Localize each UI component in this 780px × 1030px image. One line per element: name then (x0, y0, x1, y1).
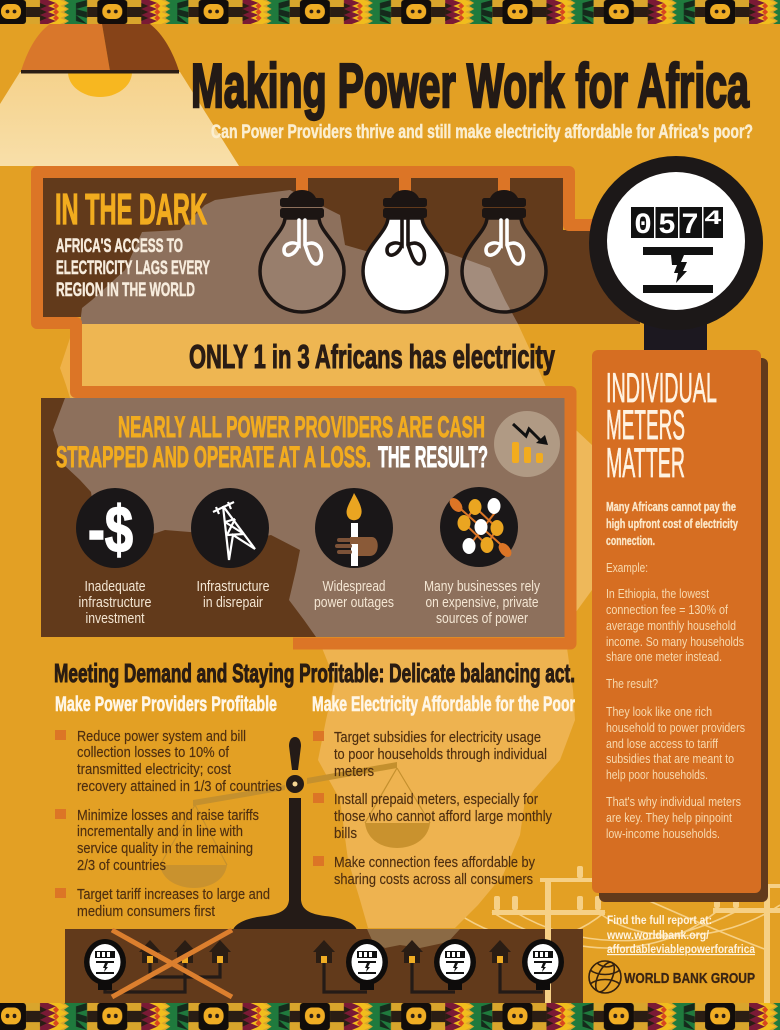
label: businesses rely on private power: Many businesses rely (424, 579, 541, 595)
icon: left light bulb (260, 166, 344, 312)
text block: access to electricity (56, 236, 210, 301)
text block: example: They look like one rich (606, 705, 712, 719)
list: electricity affordable: Install prepaid meters, especially for (334, 792, 538, 808)
illustration: balance scale (160, 737, 430, 930)
text block: access to electricity: REGION IN THE WORLD (56, 280, 195, 301)
panel: cash strapped background (41, 398, 565, 637)
top pattern band (0, 0, 780, 24)
heading: individual meters matter: MATTER (606, 439, 685, 486)
panel: in the dark brown background (43, 178, 640, 324)
icon: hanging lamp (21, 24, 179, 97)
text block: example: average monthly household (606, 619, 736, 633)
label: inadequate investment: Inadequate (84, 579, 146, 595)
list: providers profitable: Target tariff increases to large and (77, 887, 270, 903)
meters and houses: individual meters (313, 939, 564, 990)
icon: minus dollar: -$ (88, 492, 133, 566)
meters and houses: shared meter (84, 939, 231, 990)
list: electricity affordable: Target subsidies for electricity usage (334, 730, 541, 746)
label: infrastructure in disrepair: Infrastructure (196, 579, 270, 595)
list: providers profitable: incrementally and in line with (77, 824, 243, 840)
lamp light beam (0, 72, 239, 166)
orange frame connecting the panels (37, 172, 602, 644)
cross-out mark (112, 930, 232, 997)
heading: cash strapped (56, 411, 488, 474)
list: providers profitable: service quality in the remaining (77, 841, 253, 857)
callout: only 1 in 3: ONLY 1 in 3 Africans has electricity (189, 338, 555, 375)
text block: example: income. So many households (606, 635, 744, 649)
power lines illustration (440, 866, 780, 1003)
icon: electricity meter: 7 (681, 209, 699, 243)
subheading: make electricity affordable: Make Electricity Affordable for the Poor (312, 693, 575, 716)
panel: households and meters (65, 929, 583, 1003)
list: providers profitable: transmitted electricity; cost (77, 762, 231, 778)
icon: transmission tower (191, 488, 269, 568)
list: providers profitable: Minimize losses and raise tariffs (77, 808, 259, 824)
text block: access to electricity: AFRICA'S ACCESS TO (56, 236, 183, 257)
text block: upfront cost: Many Africans cannot pay the (606, 500, 736, 514)
logo: world bank group (589, 960, 755, 994)
report link: affordableviablepowerforafrica (607, 944, 756, 956)
label: widespread outages: Widespread (322, 579, 386, 595)
Africa map: northern part on panel (80, 190, 518, 324)
list: providers profitable (55, 729, 282, 920)
text block: example: Example: (606, 561, 648, 575)
report link: Find the full report at: (607, 915, 712, 927)
text block: example: subsidies that are meant to (606, 752, 734, 766)
list: electricity affordable: sharing costs across all consumers (334, 872, 533, 888)
text block: example: share one meter instead. (606, 650, 722, 664)
label: businesses rely on private power: on expensive, private (426, 595, 538, 611)
list: providers profitable: Reduce power system and bill (77, 729, 246, 745)
report link (606, 915, 756, 956)
list: providers profitable: collection losses to 10% of (77, 745, 230, 761)
heading: cash strapped: STRAPPED AND OPERATE AT A LOSS. (56, 441, 371, 474)
text block: example: and lose access to tariff (606, 737, 718, 751)
heading: individual meters matter: METERS (606, 401, 685, 448)
text block: example (606, 561, 745, 841)
text block: example: help poor households. (606, 768, 708, 782)
icon: electricity meter: 0 (634, 209, 652, 243)
heading: in the dark: IN THE DARK (55, 185, 207, 234)
label: inadequate investment (78, 579, 152, 627)
Africa map: panel two overlay (53, 398, 565, 637)
panel: individual meters (592, 350, 761, 893)
text block: example: low-income households. (606, 827, 720, 841)
heading: individual meters matter (606, 364, 717, 486)
text block: example: That's why individual meters (606, 795, 741, 809)
Africa map west coast sliver (60, 335, 76, 398)
text block: upfront cost (606, 500, 738, 548)
report link: www.worldbank.org/ (606, 930, 710, 942)
Africa map silhouette, light southern part (318, 648, 575, 928)
text block: example: The result? (606, 677, 658, 691)
label: infrastructure in disrepair (196, 579, 270, 611)
icon: electricity meter: 5 (658, 209, 676, 243)
list: electricity affordable (313, 730, 553, 888)
wiring (105, 960, 543, 992)
icon: private power network (440, 487, 518, 567)
bottom pattern band (0, 1003, 780, 1030)
text block: example: household to power providers (606, 721, 745, 735)
label: widespread outages (314, 579, 394, 611)
icon: electricity meter: 4 (704, 208, 722, 231)
list: electricity affordable: meters (334, 764, 374, 780)
list: electricity affordable: those who cannot afford large monthly (334, 809, 553, 825)
icon: right light bulb (462, 166, 546, 312)
subheading: make providers profitable: Make Power Providers Profitable (55, 693, 277, 716)
list: providers profitable: medium consumers first (77, 904, 215, 920)
highlight band: only 1 in 3 (81, 324, 546, 387)
icon: middle lit bulb (363, 166, 447, 312)
list: providers profitable: recovery attained in 1/3 of countries (77, 779, 282, 795)
label: infrastructure in disrepair: in disrepair (203, 595, 263, 611)
Africa map east horn sliver (576, 430, 592, 612)
label: businesses rely on private power: sources of power (436, 611, 528, 627)
list: electricity affordable: to poor households through individual (334, 747, 547, 763)
text block: upfront cost: connection. (606, 534, 655, 548)
list: electricity affordable: Make connection fees affordable by (334, 855, 536, 871)
heading: cash strapped: NEARLY ALL POWER PROVIDERS ARE CASH (118, 411, 485, 444)
heading: cash strapped: THE RESULT? (378, 441, 488, 474)
list: providers profitable: 2/3 of countries (77, 858, 166, 874)
panel: individual meters shadow (599, 358, 768, 902)
icon: candle in hand (315, 488, 393, 568)
text block: example: are key. They help pinpoint (606, 811, 732, 825)
list: electricity affordable: bills (334, 826, 357, 842)
label: inadequate investment: investment (86, 611, 144, 627)
text block: example: In Ethiopia, the lowest (606, 587, 709, 601)
label: businesses rely on private power (424, 579, 541, 627)
icon: minus dollar (76, 488, 154, 568)
label: widespread outages: power outages (314, 595, 394, 611)
icon: electricity meter (589, 156, 763, 352)
text block: access to electricity: ELECTRICITY LAGS EVERY (56, 258, 210, 279)
label: inadequate investment: infrastructure (78, 595, 152, 611)
icon: falling chart (494, 411, 560, 477)
text block: example: connection fee = 130% of (606, 603, 728, 617)
